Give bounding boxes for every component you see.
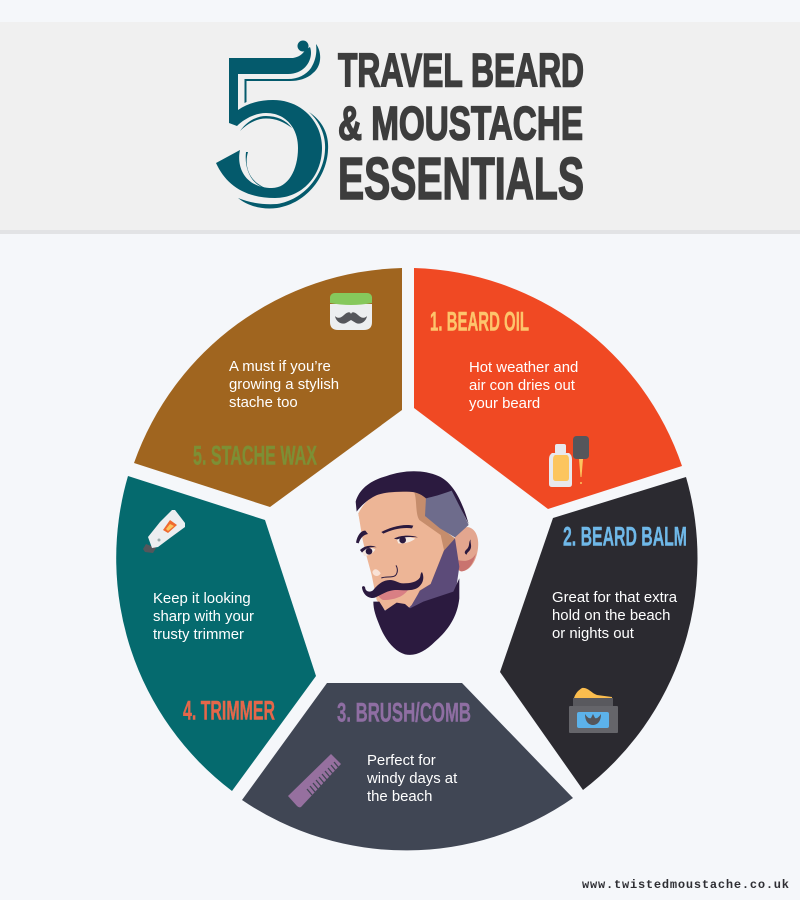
panel: 5 stache wax — [134, 268, 402, 507]
icon: trimmer — [143, 510, 185, 553]
text: beard oil: air con dries out — [469, 378, 576, 394]
text: brush/comb: Perfect for — [367, 753, 436, 769]
big numeral 5 — [216, 40, 328, 209]
heading: trimmer: 4. TRIMMER — [183, 696, 275, 726]
moustache — [362, 572, 423, 598]
text: beard balm: Great for that extra — [552, 590, 678, 606]
nose — [372, 565, 397, 578]
text: beard oil: your beard — [469, 396, 540, 412]
panel: 2 beard balm — [500, 477, 698, 790]
text: trimmer: sharp with your — [153, 609, 254, 625]
text: beard oil: Hot weather and — [469, 360, 578, 376]
panel: 4 trimmer — [116, 476, 316, 791]
beard — [373, 578, 459, 655]
text: stache wax: A must if you’re — [229, 359, 331, 375]
panel: 1 beard oil — [414, 268, 682, 509]
text: trimmer: Keep it looking — [153, 591, 251, 607]
text: brush/comb: the beach — [367, 789, 432, 805]
panel: 3 brush and comb — [242, 683, 573, 850]
illustration: bearded man portrait — [356, 471, 478, 655]
undercut fade — [425, 488, 469, 537]
heading: stache wax: 5. STACHE WAX — [193, 440, 317, 470]
title: ESSENTIALS — [338, 146, 584, 212]
skin light — [358, 492, 444, 610]
skin shadow — [358, 490, 457, 603]
text: stache wax: stache too — [229, 395, 298, 411]
beard fade — [403, 538, 459, 613]
title — [338, 44, 584, 212]
icon: oil bottle and dropper — [549, 436, 589, 487]
text: beard balm: or nights out — [552, 626, 635, 642]
text: stache wax: growing a stylish — [229, 377, 339, 393]
title: & MOUSTACHE — [338, 96, 583, 150]
icon: balm jar — [569, 688, 618, 733]
text: beard balm: hold on the beach — [552, 608, 670, 624]
title: TRAVEL BEARD — [338, 44, 584, 96]
website url: www.twistedmoustache.co.uk — [582, 878, 789, 892]
icon: comb — [288, 754, 341, 807]
text: brush/comb: windy days at — [366, 771, 458, 787]
text: trimmer: trusty trimmer — [153, 627, 244, 643]
lips — [378, 589, 408, 600]
icon: wax tin — [330, 293, 372, 330]
eyes — [356, 525, 418, 556]
heading: brush/comb: 3. BRUSH/COMB — [337, 698, 471, 728]
header banner — [0, 22, 800, 234]
ear — [454, 527, 478, 571]
heading: beard oil: 1. BEARD OIL — [430, 306, 529, 336]
hair — [356, 471, 469, 524]
heading: beard balm: 2. BEARD BALM — [563, 522, 687, 552]
